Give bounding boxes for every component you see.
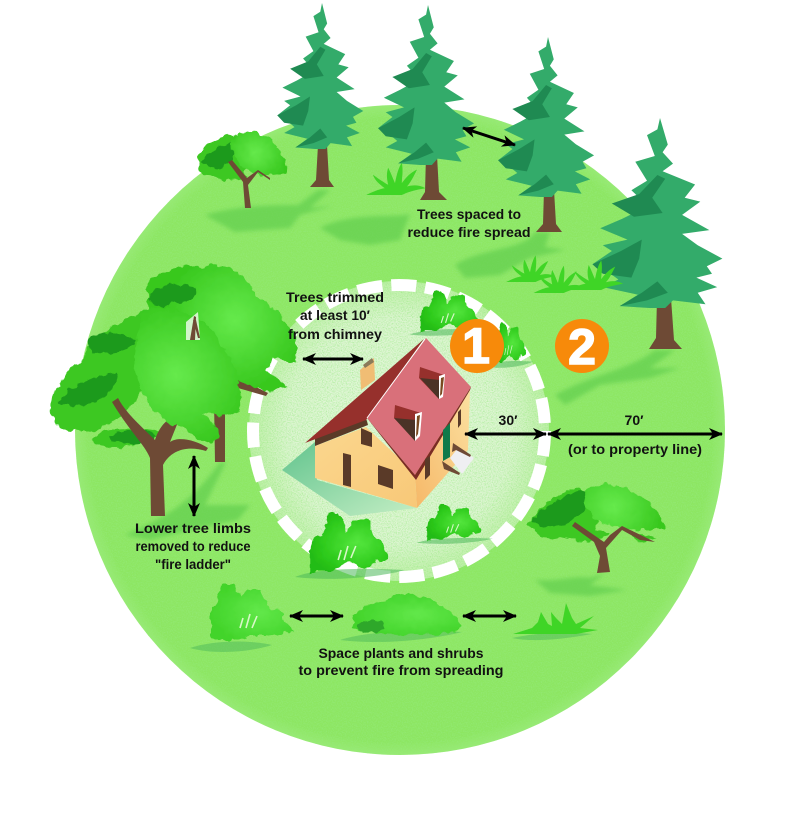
conifer tree 1 — [277, 3, 363, 187]
badge 1 — [450, 318, 504, 374]
badge 2 — [555, 319, 609, 375]
badge 2: 2 — [568, 319, 596, 375]
right wall — [415, 390, 470, 508]
shrub front of house — [417, 505, 493, 544]
roof shadow edge — [367, 387, 471, 480]
arrow: 70 feet — [548, 432, 722, 436]
label: lower tree limbs — [135, 520, 251, 572]
shrub bottom left — [190, 584, 292, 652]
chimney — [360, 358, 375, 390]
label: trees spaced: Trees spaced to — [417, 206, 521, 222]
pink roof — [367, 338, 471, 475]
badge 1: 1 — [462, 318, 490, 374]
shrub bottom middle — [340, 594, 462, 642]
grass clumps — [366, 163, 623, 293]
dormer upper — [419, 367, 445, 399]
house — [305, 338, 474, 508]
arrow: shrub spacing right — [463, 614, 516, 618]
small tree top left — [197, 132, 287, 208]
label: space plants: to prevent fire from spreading — [298, 662, 504, 678]
arrow: shrub spacing left — [290, 614, 343, 618]
conifer tree 2 — [378, 5, 474, 200]
label: trees trimmed: Trees trimmed — [286, 289, 384, 305]
label: reduce fire spread: reduce fire spread — [408, 224, 530, 240]
conifer tree 4 — [592, 118, 722, 349]
label: space plants: Space plants and shrubs — [318, 645, 484, 661]
label: 70 feet: 70′ — [625, 412, 644, 428]
large deciduous tree front — [50, 307, 241, 516]
label: lower tree limbs: Lower tree limbs — [135, 520, 251, 536]
ground shadows — [125, 190, 680, 596]
dark red roof — [305, 339, 424, 443]
large deciduous tree rear — [146, 265, 297, 462]
entry steps — [442, 443, 474, 475]
left wall — [315, 427, 417, 508]
shrub lower left inner — [295, 514, 405, 579]
green door — [443, 423, 450, 461]
windows and door left wall — [343, 428, 393, 489]
arrow: chimney clearance — [303, 358, 363, 360]
grass bottom right — [512, 603, 598, 640]
conifer tree 3 — [498, 37, 594, 232]
small tree right — [528, 483, 664, 573]
shrub right of badge 1 — [486, 324, 533, 368]
label: trees trimmed — [286, 289, 384, 342]
dark eave — [315, 418, 368, 446]
shrub behind badge 1 — [410, 292, 490, 336]
arrow: tree spacing — [463, 128, 515, 145]
arrow: fire ladder clearance — [192, 456, 196, 516]
shadow of house — [282, 442, 417, 516]
zone 1 inner circle — [249, 281, 549, 581]
label: 30 feet: 30′ — [499, 412, 518, 428]
dashed zone boundary — [253, 285, 545, 577]
label: trees trimmed: from chimney — [288, 326, 382, 342]
label: space plants — [298, 645, 504, 678]
label: lower tree limbs: "fire ladder" — [155, 556, 231, 572]
label: property line: (or to property line) — [568, 441, 702, 457]
zone 2 ground circle — [75, 105, 725, 755]
arrow: 30 feet — [465, 432, 546, 436]
windows right wall — [425, 409, 461, 480]
dormer lower — [394, 405, 422, 441]
label: lower tree limbs: removed to reduce — [136, 538, 251, 554]
label: trees trimmed: at least 10′ — [300, 307, 371, 323]
